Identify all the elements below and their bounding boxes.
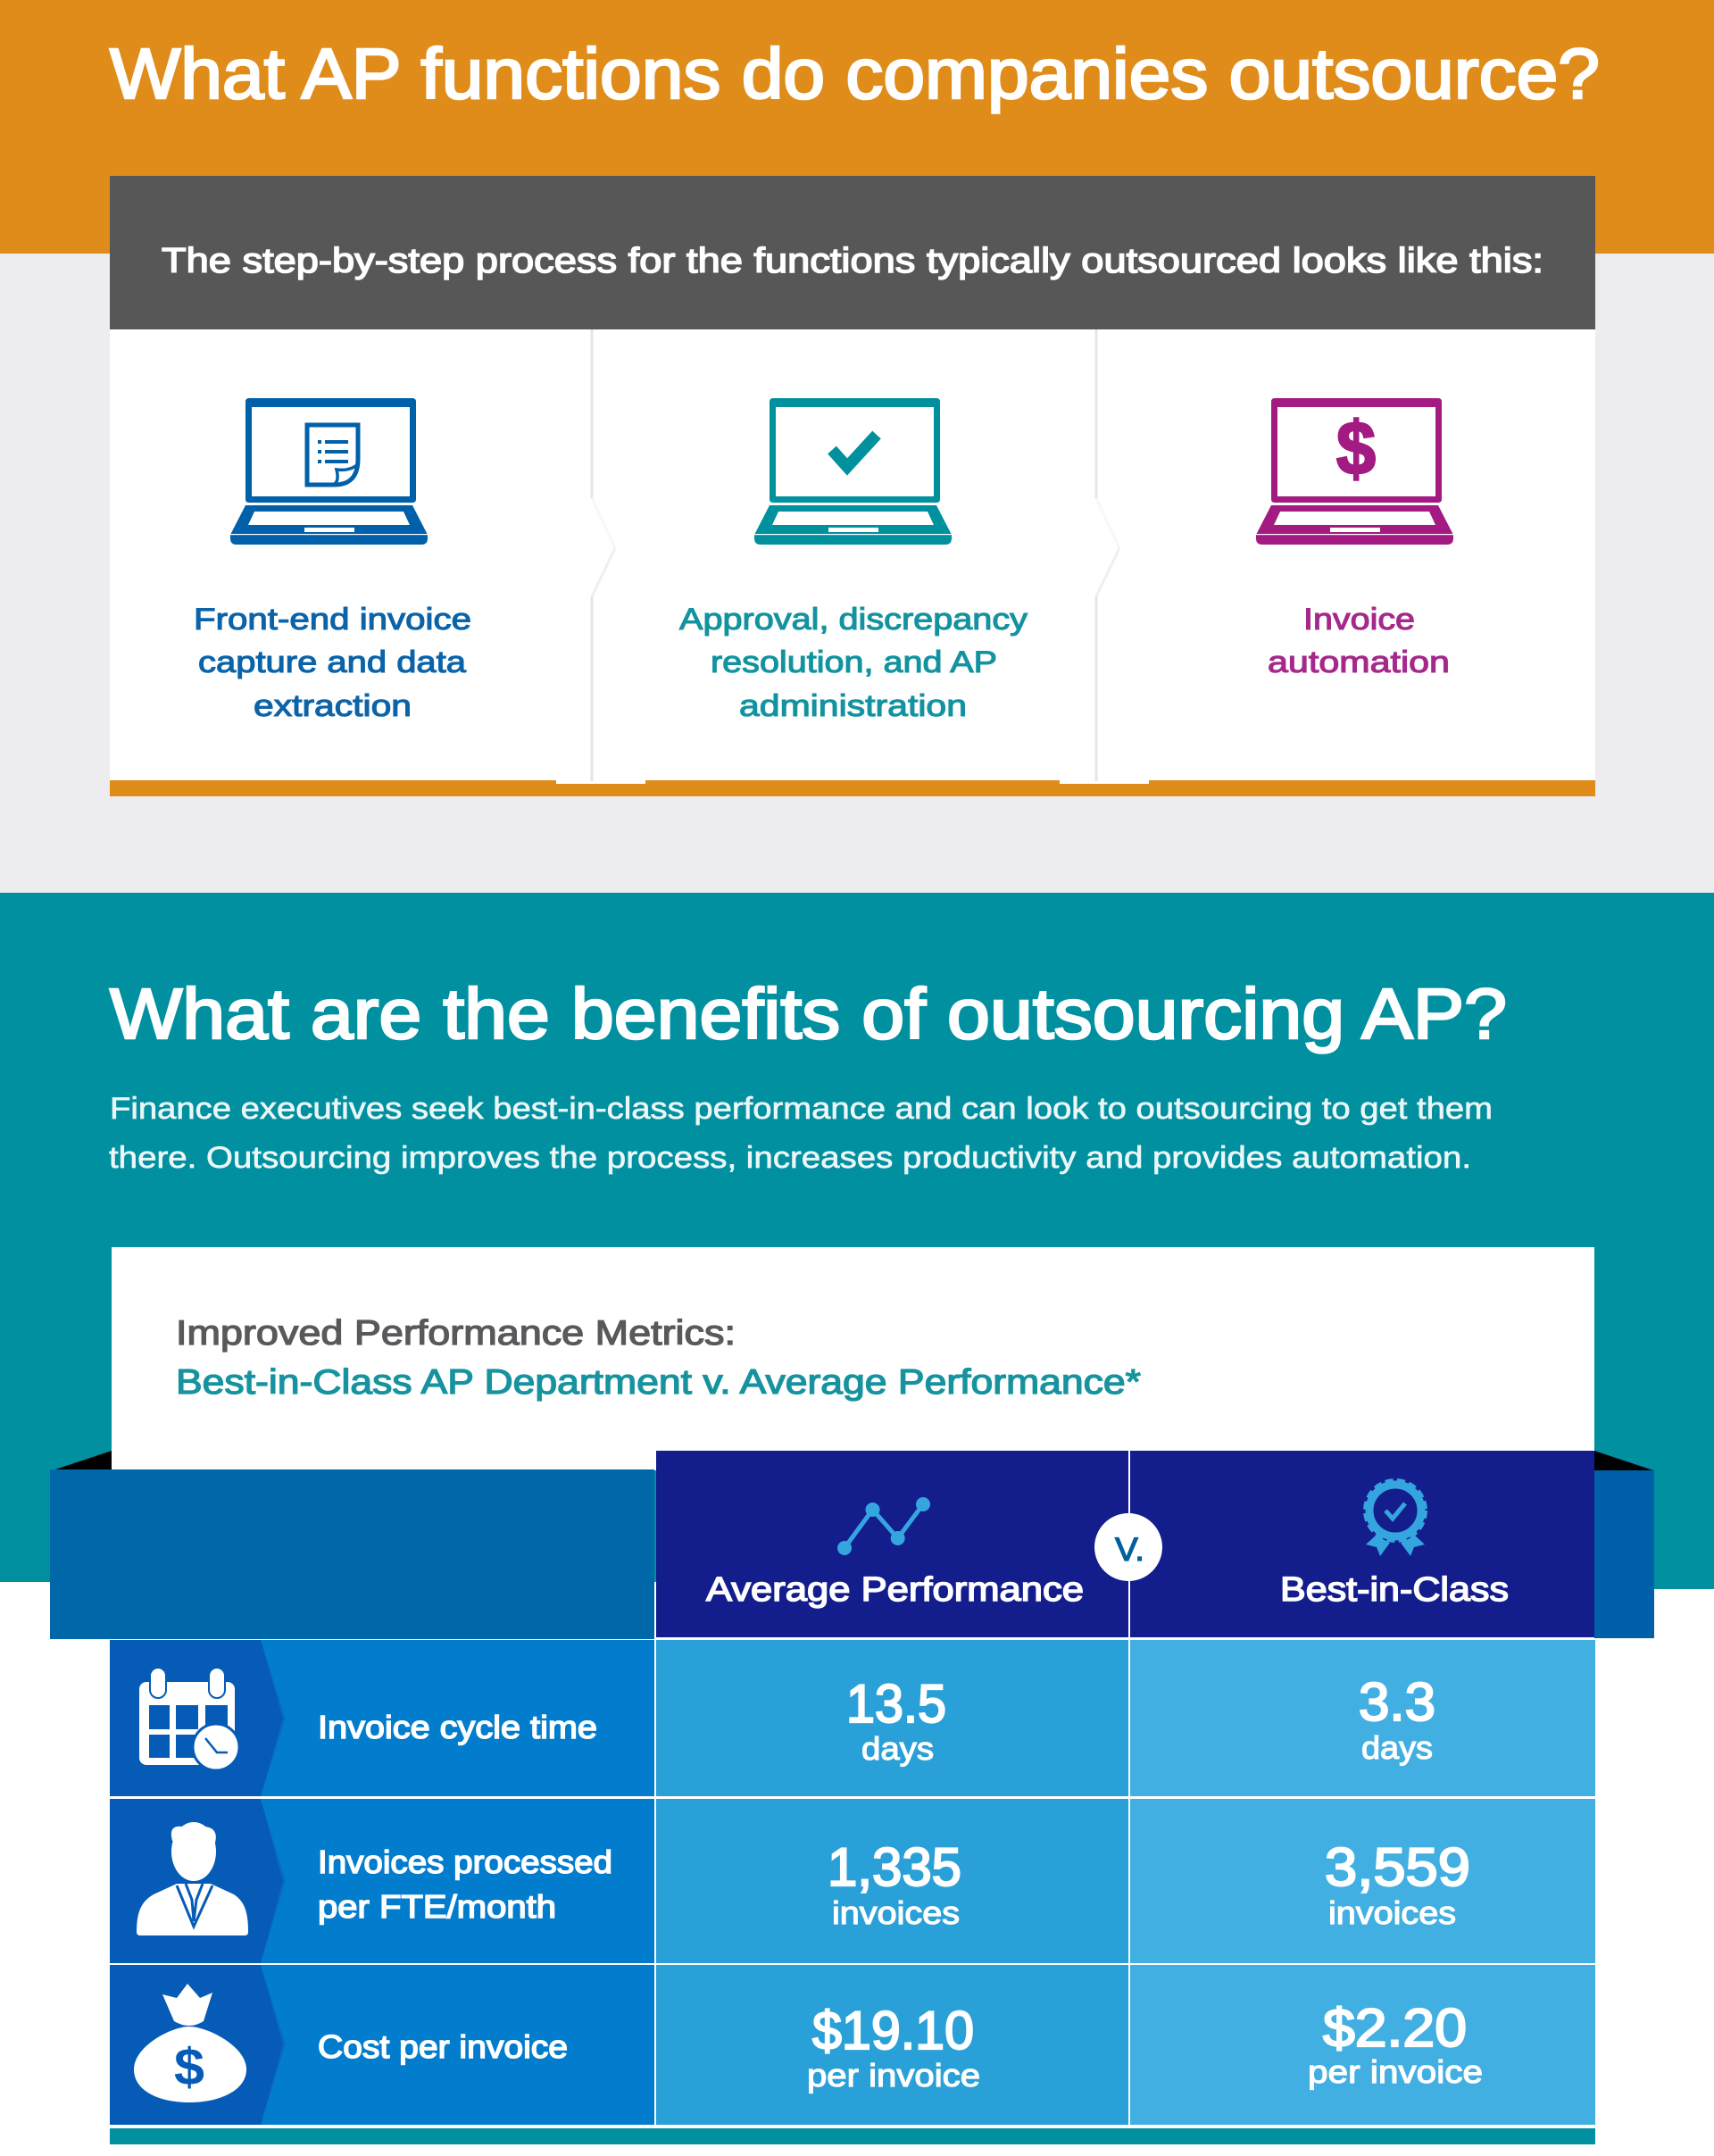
value: best-in-class invoices: 3,559 <box>1325 1837 1470 1897</box>
value: best-in-class cost: $2.20 <box>1323 1998 1467 2058</box>
icon: line chart <box>837 1497 930 1555</box>
panel: step-by-step process <box>110 176 1595 796</box>
text: step 2 label: administration <box>739 689 967 723</box>
value: average cycle time: days <box>861 1730 934 1767</box>
ribbon: left header block <box>50 1469 654 1639</box>
value: average cost: $19.10 <box>812 2001 974 2060</box>
value: best-in-class invoices <box>1130 1799 1595 1963</box>
text: benefits intro paragraph <box>109 1092 1493 1175</box>
icon: v. badge <box>1094 1513 1162 1581</box>
table row: cost per invoice <box>110 1965 1595 2125</box>
text: metrics heading: Improved Performance Metrics: <box>176 1314 736 1353</box>
ribbon fold: right <box>1594 1451 1653 1470</box>
arrow: divider step 2 to 3 <box>1096 329 1119 781</box>
panel header bar <box>110 176 1595 329</box>
title: benefits of outsourcing: What are the benefits of outsourcing AP? <box>110 974 1507 1053</box>
text: step 1 label: capture and data <box>198 645 466 679</box>
arrow: divider step 1 to 2 <box>592 329 615 781</box>
icon: money bag: $ <box>174 2038 204 2096</box>
text: benefits intro paragraph: Finance executives seek best-in-class performance and can look to outsourcing to get them <box>110 1092 1493 1126</box>
value: average invoices: 1,335 <box>828 1837 961 1897</box>
text: step 1 label: Front-end invoice <box>194 603 471 637</box>
text: step 1 label: extraction <box>254 689 412 723</box>
value: best-in-class cost <box>1130 1965 1595 2125</box>
value: best-in-class cycle time: 3.3 <box>1359 1672 1435 1732</box>
orange base bar <box>110 780 1595 796</box>
section background: light grey band <box>0 254 1714 893</box>
section background: orange header band <box>0 0 1714 254</box>
value: best-in-class cost: per invoice <box>1308 2053 1483 2090</box>
icon: award rosette <box>1365 1480 1426 1556</box>
value: best-in-class invoices: invoices <box>1328 1894 1456 1931</box>
row label cell: Cost per invoice <box>318 2028 568 2065</box>
row label cell: Invoice cycle time <box>318 1709 597 1745</box>
text: step 1 label <box>194 603 471 723</box>
text: benefits intro paragraph: there. Outsourcing improves the process, increases productivity and provides automation. <box>109 1141 1471 1175</box>
icon: v. badge: V. <box>1115 1531 1144 1568</box>
text: average performance column heading: Average Performance <box>706 1571 1084 1609</box>
value: average cycle time: 13.5 <box>846 1674 946 1734</box>
table header: navy band <box>656 1451 1594 1637</box>
value: best-in-class cycle time: days <box>1361 1729 1433 1766</box>
icon: laptop with dollar sign <box>1256 398 1453 545</box>
value: average invoices <box>656 1799 1128 1963</box>
ribbon: right end <box>1594 1470 1654 1638</box>
value: average cost: per invoice <box>807 2057 980 2094</box>
text: step 3 label: Invoice <box>1303 603 1415 637</box>
row label cell: Invoices processed <box>318 1844 612 1880</box>
value: average cycle time <box>656 1640 1128 1796</box>
text: best-in-class column heading: Best-in-Class <box>1280 1571 1509 1609</box>
text: metrics subheading: Best-in-Class AP Department v. Average Performance* <box>176 1363 1141 1402</box>
value: average cost <box>656 1965 1128 2125</box>
section background: teal band <box>0 893 1714 1589</box>
table row: invoices processed <box>110 1799 1595 1963</box>
ribbon fold: left <box>53 1451 112 1470</box>
table row: invoice cycle time <box>110 1640 1595 1796</box>
text: step 2 label <box>679 603 1028 723</box>
value: average invoices: invoices <box>832 1894 960 1931</box>
text: step 2 label: resolution, and AP <box>711 645 997 679</box>
row label cell <box>110 1640 654 1796</box>
text: step 2 label: Approval, discrepancy <box>679 603 1028 637</box>
panel: performance metrics heading card <box>112 1247 1594 1470</box>
row label cell <box>110 1799 654 1963</box>
table footer: teal bar <box>110 2128 1595 2144</box>
panel header bar: The step-by-step process for the functions typically outsourced looks like this: <box>162 242 1543 280</box>
icon: calendar with clock <box>139 1668 239 1770</box>
title: AP functions: What AP functions do companies outsource? <box>110 34 1600 113</box>
text: step 3 label: automation <box>1268 645 1450 679</box>
icon: laptop with dollar sign: $ <box>1336 406 1376 490</box>
row label cell: per FTE/month <box>318 1888 556 1925</box>
row label cell <box>110 1965 654 2125</box>
icon: money bag <box>134 1984 246 2102</box>
panel body <box>110 329 1595 781</box>
icon: laptop with check mark <box>754 398 952 545</box>
icon: business person <box>137 1822 248 1935</box>
text: step 3 label <box>1268 603 1450 679</box>
icon: laptop with document <box>230 398 428 545</box>
value: best-in-class cycle time <box>1130 1640 1595 1796</box>
